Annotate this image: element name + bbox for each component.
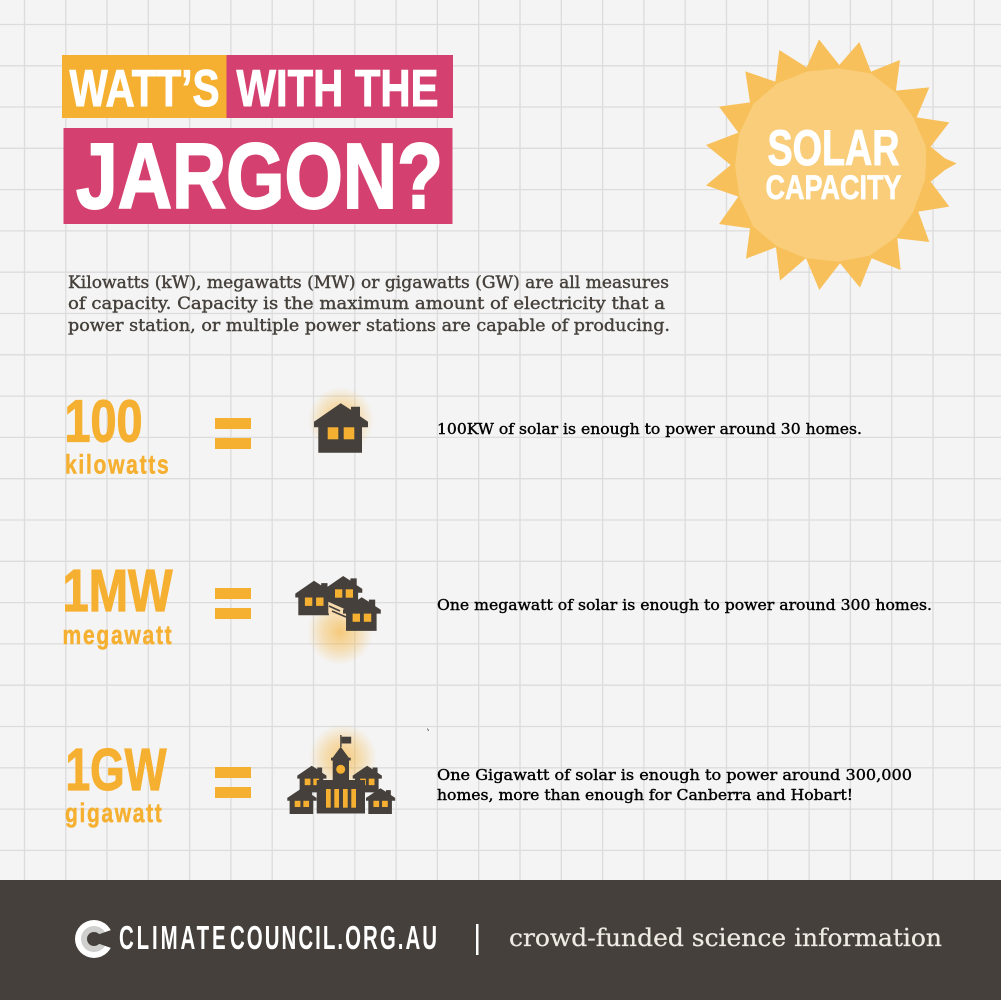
equals sign [215,418,251,449]
website: COUNCIL.ORG.AU [230,919,437,956]
sun label: CAPACITY: CAPACITY [766,169,902,207]
equals sign [215,767,251,798]
icon: glow under houses [307,599,373,665]
value: 100: 100 [64,388,142,454]
sun rays [706,39,957,290]
row: 100 kilowatts [64,387,862,480]
sun label: SOLAR: SOLAR [768,120,900,176]
website: CLIMATE [119,919,226,956]
icon: single house [314,403,368,453]
footer band [0,880,1001,1000]
intro text: power station, or multiple power stations are capable of producing. [68,316,670,336]
title bar: orange [62,55,226,118]
unit: megawatt: megawatt [62,621,172,651]
value: 1GW: 1GW [66,737,167,803]
icon: three houses [295,576,381,631]
row: 1 gigawatt [65,724,912,829]
description: One megawatt of solar is enough to power around 300 homes. [437,596,932,614]
description line 2: homes, more than enough for Canberra and Hobart! [437,786,853,804]
title bar: pink top [226,55,453,118]
intro text: Kilowatts (kW), megawatts (MW) or gigawatts (GW) are all measures [68,273,669,293]
tagline: crowd-funded science information [509,924,942,952]
intro text [68,273,670,336]
unit: gigawatt: gigawatt [65,799,162,829]
title words: WITH THE: WITH THE [236,60,438,118]
footer [0,880,1001,1000]
icon: single house glow [308,387,374,453]
intro text: of capacity. Capacity is the maximum amount of electricity that a [68,294,665,314]
value: 1MW: 1MW [62,558,173,624]
sun disc [735,68,926,262]
description line 1: One Gigawatt of solar is enough to power around 300,000 [437,766,912,784]
icon: glow behind town [309,724,377,792]
title [62,55,453,228]
title word: WATT'S: WATT’S [70,60,220,118]
description: 100KW of solar is enough to power around 30 homes. [437,420,862,438]
sun badge [706,39,957,290]
row: 1 megawatt [62,558,932,665]
logo: Climate Council C mark [75,920,114,958]
divider [476,924,478,955]
equals sign [215,588,251,619]
title word: JARGON?: JARGON? [76,124,443,228]
icon: town hall with houses [287,735,395,814]
website [119,919,437,956]
title bar: pink bottom [64,128,452,224]
unit: kilowatts: kilowatts [65,450,169,480]
